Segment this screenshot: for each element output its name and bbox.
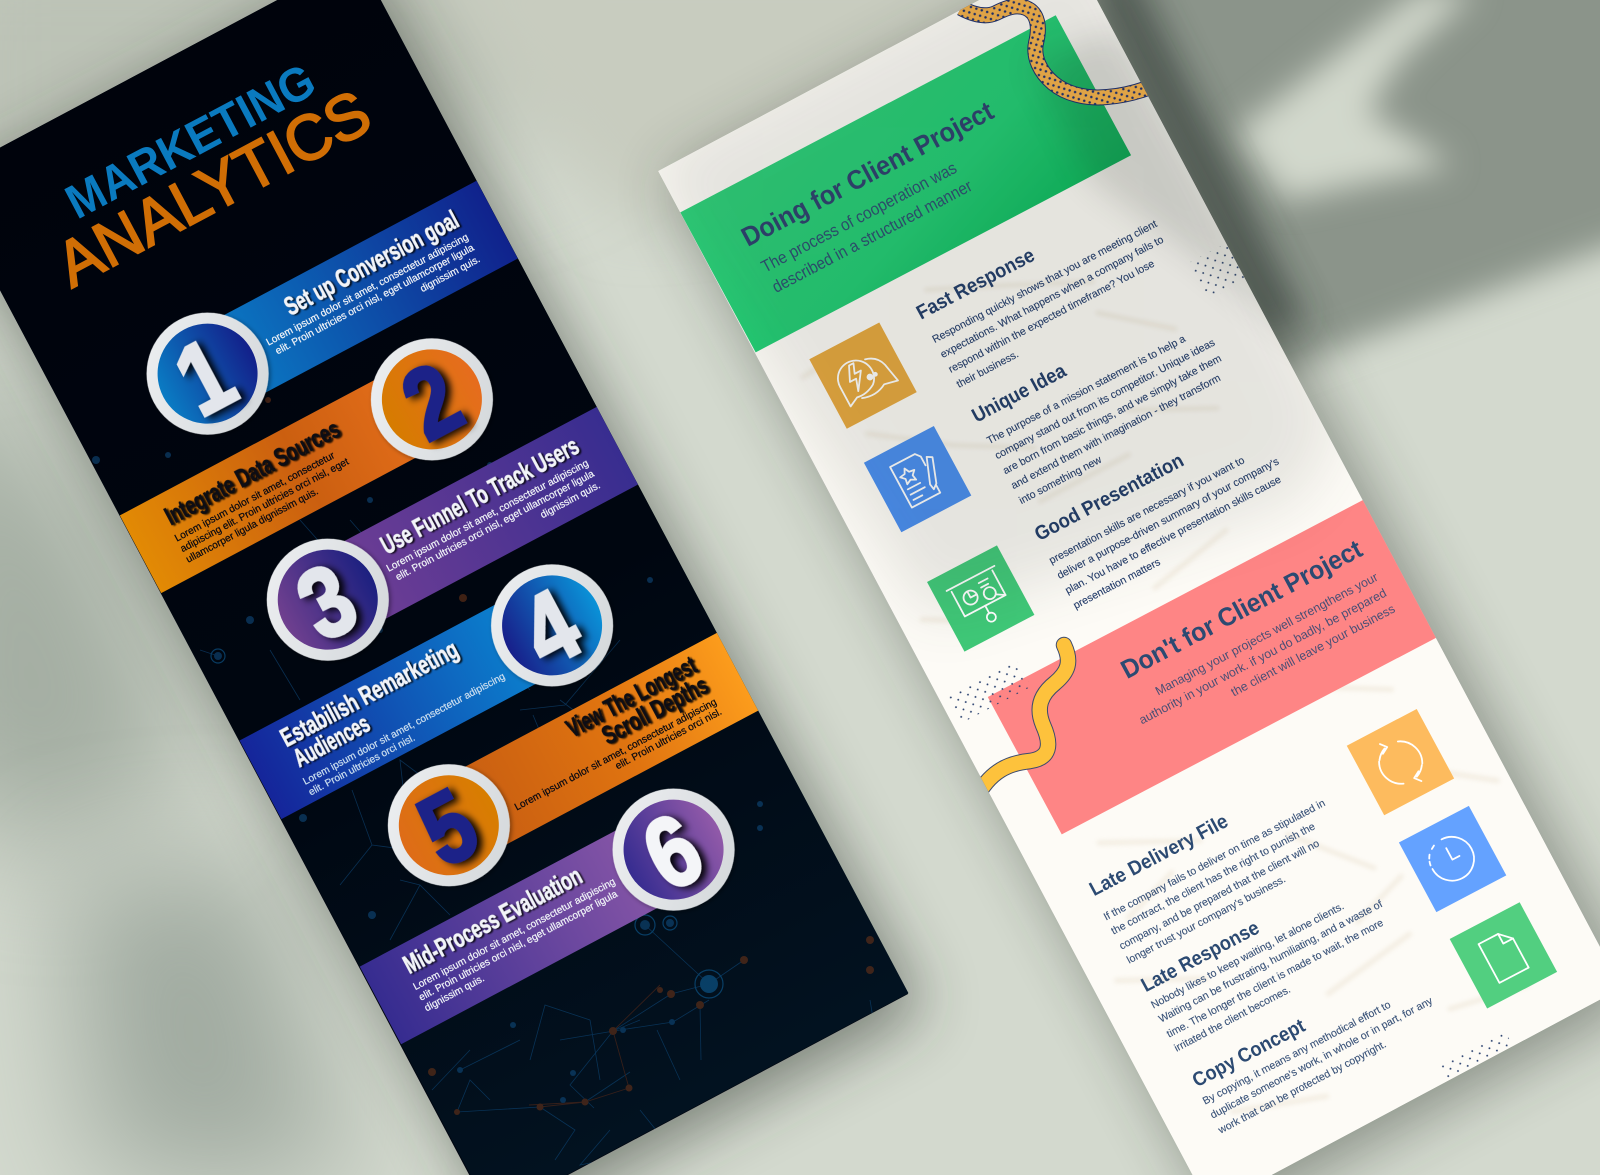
item: Late Delivery File: company, and be prepared that the client will no <box>1117 838 1322 952</box>
step 6: Mid-Process Evaluation: 6 <box>625 791 719 912</box>
ribbon: yellow wave <box>975 645 1068 800</box>
step 6: Mid-Process Evaluation <box>352 767 756 1059</box>
header: Don't for Client Project: Don't for Client Project <box>1116 533 1367 685</box>
step 1: Set up Conversion goal: elit. Proin ultricies orci nisl, eget ullamcorper ligula <box>274 242 476 357</box>
step 4: Estabilish Remarketing Audiences: Lorem ipsum dolor sit amet, consectetur adipiscing <box>301 671 507 788</box>
header: Doing for Client Project: The process of cooperation was <box>758 158 960 276</box>
step 2: Integrate Data Sources: adipiscing elit. Proin ultricies orci nisl, eget <box>179 456 351 555</box>
item: Unique Idea <box>864 336 1222 532</box>
item: Good Presentation <box>927 456 1281 652</box>
header: Doing for Client Project <box>680 15 1131 352</box>
step 6: Mid-Process Evaluation: dignissim quis. <box>423 973 487 1014</box>
step 3: Use Funnel To Track Users: dignissim quis. <box>539 480 602 521</box>
step 3: Use Funnel To Track Users: 3 <box>280 541 374 662</box>
step 1: Set up Conversion goal: 1 <box>158 316 252 437</box>
item: Late Delivery File: longer trust your company's business. <box>1125 873 1288 966</box>
rope: dotted orange top <box>961 6 1148 97</box>
item: Late Response: Late Response <box>1138 917 1263 997</box>
step 3: Use Funnel To Track Users <box>245 392 646 682</box>
item: Late Delivery File: If the company fails to deliver on time as stipulated in <box>1102 797 1327 923</box>
step 5: View The Longest Scroll Depths: Scroll Depths <box>597 670 713 750</box>
item: Unique Idea: The purpose of a mission statement is to help a <box>985 333 1188 447</box>
item: Good Presentation: plan. You have to effective presentation skills cause <box>1063 474 1283 597</box>
title: ANALYTICS <box>44 76 382 301</box>
step 5: View The Longest Scroll Depths: View The Longest <box>561 650 702 743</box>
icon: clock <box>1399 806 1506 912</box>
title: MARKETING <box>57 54 324 230</box>
header: Don't for Client Project: Managing your projects well strengthens your <box>1153 570 1380 698</box>
item: Copy Concept: By copying, it means any methodical effort to <box>1201 999 1393 1107</box>
lighting overlay on poster <box>640 0 1340 620</box>
step 2: Integrate Data Sources <box>112 317 514 608</box>
item: Good Presentation: presentation skills are necessary if you want to <box>1047 454 1247 567</box>
step 5: View The Longest Scroll Depths: Lorem ipsum dolor sit amet, consectetur adipiscing <box>513 697 719 813</box>
item: Late Response: Waiting can be frustrating, humiliating, and a waste of <box>1157 898 1385 1025</box>
item: Fast Response: respond within the expected timeframe? You lose <box>947 258 1157 376</box>
item: Unique Idea: into something new <box>1017 454 1104 507</box>
item: Unique Idea: and extend them with imagination - they transform <box>1009 372 1223 492</box>
step 5: View The Longest Scroll Depths <box>366 618 766 908</box>
item: Late Delivery File <box>1085 708 1462 966</box>
step 2: Integrate Data Sources: ullamcorper ligula dignissim quis. <box>184 486 320 566</box>
item: Good Presentation: presentation matters <box>1071 556 1163 612</box>
step 4: Estabilish Remarketing Audiences: Estabilish Remarketing <box>275 634 463 753</box>
constellation network decoration <box>92 397 885 1165</box>
step 4: Estabilish Remarketing Audiences: 4 <box>503 567 597 689</box>
step 2: Integrate Data Sources: Lorem ipsum dolor sit amet, consectetur <box>173 450 337 544</box>
step 1: Set up Conversion goal <box>125 166 526 456</box>
step 2: Integrate Data Sources: Integrate Data Sources <box>159 413 345 531</box>
item: Good Presentation: deliver a purpose-driven summary of your company's <box>1055 456 1281 582</box>
header: Doing for Client Project: Doing for Client Project <box>736 96 999 252</box>
step 2: Integrate Data Sources: 2 <box>385 340 479 462</box>
header: Don't for Client Project: authority in your work. if you do badly, be prepared <box>1137 586 1389 727</box>
step 4: Estabilish Remarketing Audiences: Audiences <box>288 708 375 773</box>
dot grid bottom <box>1442 1034 1510 1078</box>
step 3: Use Funnel To Track Users: elit. Proin ultricies orci nisl, eget ullamcorper ligula <box>394 469 597 583</box>
dot grid middle left <box>950 662 1024 720</box>
item: Fast Response: Responding quickly shows that you are meeting client <box>930 218 1159 346</box>
step 1: Set up Conversion goal: Set up Conversion goal <box>279 204 463 321</box>
step 3: Use Funnel To Track Users: Lorem ipsum dolor sit amet, consectetur adipiscing <box>385 458 591 574</box>
icon: document with star and pen <box>864 426 971 532</box>
item: Unique Idea: are born from basic things, and we simply take them <box>1001 352 1224 477</box>
step 4: Estabilish Remarketing Audiences <box>232 543 635 834</box>
header: Don't for Client Project <box>988 497 1442 834</box>
step 1: Set up Conversion goal: Lorem ipsum dolor sit amet, consectetur adipiscing <box>265 232 470 348</box>
item: Late Delivery File: the contract, the client has the right to punish the <box>1109 821 1317 937</box>
item: Copy Concept: duplicate someone's work, in whole or in part, for any <box>1208 995 1435 1121</box>
step 6: Mid-Process Evaluation: Mid-Process Evaluation <box>398 860 587 980</box>
item: Fast Response: their business. <box>955 348 1021 391</box>
item: Late Response: Nobody likes to keep waiting, let alone clients. <box>1149 900 1346 1011</box>
item: Fast Response: Fast Response <box>913 244 1038 324</box>
panel: client project poster <box>640 0 1600 1175</box>
poster content rotated <box>0 9 826 1059</box>
header: Don't for Client Project: the client will leave your business <box>1229 602 1397 699</box>
icon: blank document <box>1450 902 1557 1009</box>
item: Unique Idea: company stand out from its competitor. Unique ideas <box>993 337 1217 462</box>
item: Copy Concept: Copy Concept <box>1189 1015 1309 1092</box>
step 5: View The Longest Scroll Depths: elit. Proin ultricies orci nisl. <box>614 707 724 772</box>
dot grid top <box>1190 246 1244 299</box>
panel: dark marketing analytics poster <box>0 0 908 1175</box>
step 6: Mid-Process Evaluation: Lorem ipsum dolor sit amet, consectetur adipiscing <box>412 877 617 993</box>
step 4: Estabilish Remarketing Audiences: elit. Proin ultricies orci nisl. <box>307 733 417 798</box>
item: Fast Response: expectations. What happens when a company fails to <box>938 234 1166 361</box>
icon: refresh arrows <box>1347 709 1454 815</box>
step 5: View The Longest Scroll Depths: 5 <box>401 767 495 888</box>
icon: presentation board <box>927 545 1034 652</box>
item: Fast Response <box>809 220 1164 429</box>
item: Late Response: time. The longer the client is made to wait, the more <box>1165 917 1386 1040</box>
header: Doing for Client Project: described in a structured manner <box>769 176 976 297</box>
item: Late Response: irritated the client becomes. <box>1172 984 1293 1055</box>
item: Unique Idea: Unique Idea <box>968 360 1071 427</box>
item: Late Delivery File: Late Delivery File <box>1086 810 1232 901</box>
item: Copy Concept <box>1187 900 1557 1146</box>
step 6: Mid-Process Evaluation: elit. Proin ultricies orci nisl, eget ullamcorper ligula <box>417 889 620 1003</box>
item: Good Presentation: Good Presentation <box>1031 450 1188 546</box>
item: Late Response <box>1137 804 1509 1055</box>
step 3: Use Funnel To Track Users: Use Funnel To Track Users <box>375 430 584 560</box>
marble texture <box>802 280 1499 1114</box>
item: Copy Concept: work that can be protected by copyright. <box>1216 1039 1388 1137</box>
step 1: Set up Conversion goal: dignissim quis. <box>419 254 482 295</box>
icon: lightning chat bubbles <box>809 323 917 429</box>
